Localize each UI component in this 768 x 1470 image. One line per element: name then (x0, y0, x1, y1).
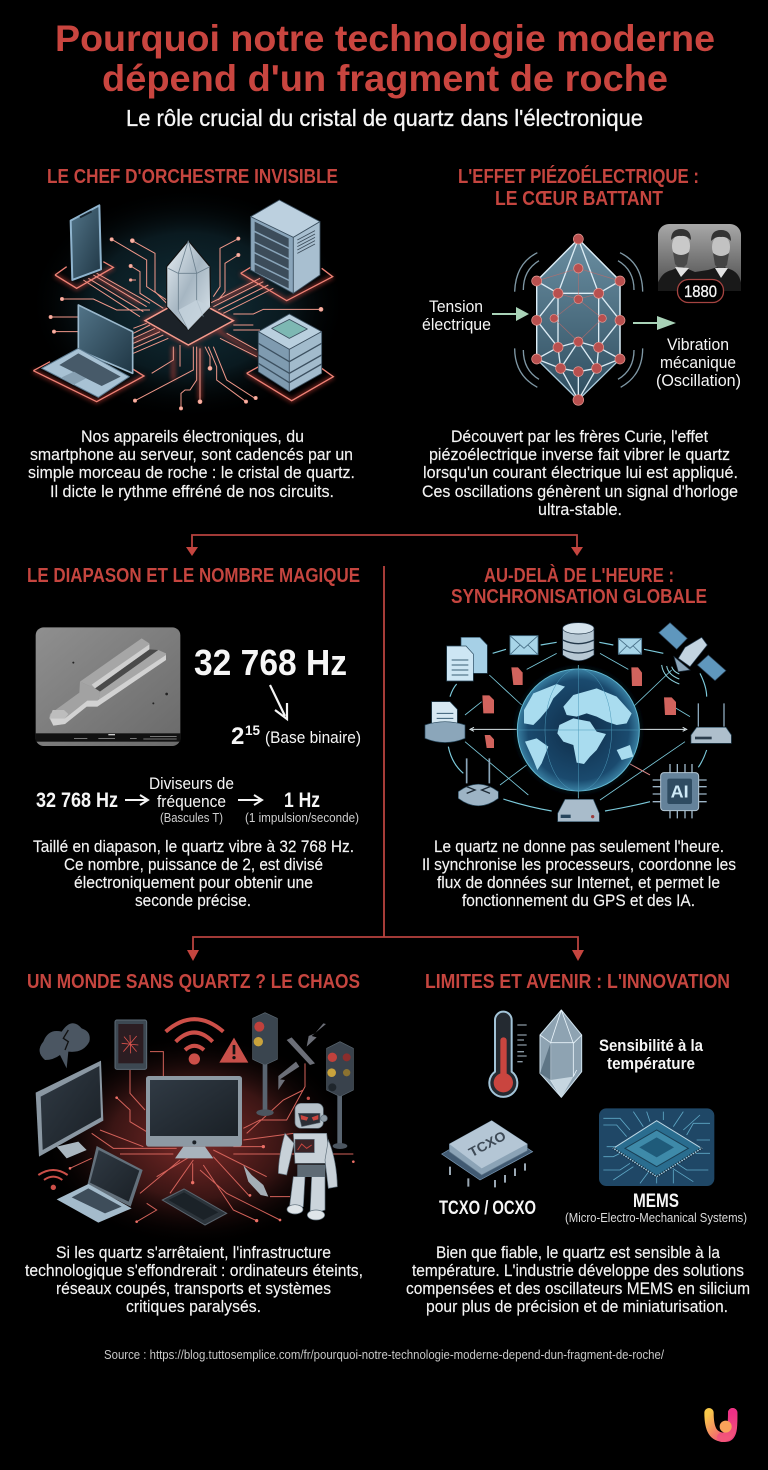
satellite (659, 623, 726, 681)
arrow (238, 795, 262, 805)
icon: logo (709, 1413, 733, 1437)
text: monde sans quartz: Si les quartz s'arrêtaient, l'infrastructure (56, 1243, 331, 1262)
text: effet piézoélectrique: lorsqu'un courant électrique lui est appliqué. (423, 463, 738, 482)
thermometer (489, 1012, 527, 1097)
text: chef d'orchestre: simple morceau de roche : le cristal de quartz. (28, 463, 355, 482)
label: tension électrique: Tension (429, 297, 483, 316)
illustration: crystal lattice (515, 234, 643, 405)
phone (71, 205, 101, 280)
slot shadow between prongs (95, 649, 158, 692)
power of two: 2 (231, 723, 244, 750)
power of two: 15 (245, 722, 260, 738)
text: au-delà de l'heure: Il synchronise les processeurs, coordonne les (422, 855, 736, 874)
connector arrows: row 1 to row 2 (186, 535, 583, 556)
divider chain: (1 impulsion/seconde) (245, 810, 359, 825)
label: MEMS (565, 1191, 747, 1225)
laptop (57, 1146, 143, 1223)
arrow (125, 795, 148, 805)
divider chain: (Bascules T) (160, 810, 223, 825)
label: sensibilité: température (607, 1054, 695, 1073)
label: tension électrique: électrique (422, 315, 491, 334)
source line: Source : https://blog.tuttosemplice.com/fr/pourquoi-notre-technologie-moderne-depend-dun-fragment-de-roche/ (104, 1347, 664, 1362)
database (563, 623, 594, 661)
text: diapason: Taillé en diapason, le quartz vibre à 32 768 Hz. (33, 837, 354, 856)
divider chain: 32 768 Hz (36, 789, 118, 812)
atoms (532, 234, 625, 405)
printer/file server (425, 702, 465, 742)
arrow: frequency to power of two (270, 685, 287, 719)
illustration: temperature sensitivity (489, 1010, 582, 1097)
title: Pourquoi notre technologie moderne (55, 18, 715, 59)
lattice body (537, 239, 620, 400)
divider chain: 1 Hz (284, 789, 320, 812)
text: effet piézoélectrique (422, 427, 738, 519)
data files (482, 667, 676, 748)
text: chef d'orchestre: Nos appareils électroniques, du (81, 427, 304, 446)
title: dépend d'un fragment de roche (102, 58, 668, 99)
text: au-delà de l'heure: Le quartz ne donne pas seulement l'heure. (434, 837, 724, 856)
subtitle: Le rôle crucial du cristal de quartz dans l'électronique (126, 105, 643, 131)
smartphone (162, 1189, 227, 1225)
crystal (540, 1010, 582, 1097)
heading: effet piézoélectrique: LE CŒUR BATTANT (495, 188, 663, 210)
text: limites et avenir (406, 1243, 750, 1316)
frequency value: 32 768 Hz (194, 642, 347, 683)
illustration: TCXO chip: TCXO (466, 1128, 508, 1160)
text: au-delà de l'heure: flux de données sur Internet, et permet le (437, 873, 720, 892)
divider chain: Diviseurs de (149, 774, 234, 793)
text: chef d'orchestre: smartphone au serveur, sont cadencés par un (30, 445, 353, 464)
text: effet piézoélectrique: piézoélectrique inverse fait vibrer le quartz (429, 445, 730, 464)
text: diapason: électroniquement pour obtenir une (74, 873, 313, 892)
cracked tablet (115, 1020, 147, 1069)
label: vibration mécanique: (Oscillation) (656, 371, 741, 390)
envelopes (510, 636, 642, 655)
text: au-delà de l'heure: fonctionnement du GPS et des IA. (462, 891, 695, 910)
ring links (448, 642, 707, 811)
connector arrows: centre line to row 3 (187, 566, 584, 961)
server (251, 200, 320, 293)
monitor centre (146, 1076, 242, 1158)
divider chain: fréquence (157, 792, 226, 811)
broken arrows (278, 1023, 326, 1090)
text: limites et avenir: pour plus de précision et de miniaturisation. (426, 1297, 728, 1316)
warning sign (219, 1038, 248, 1063)
lit edges (50, 655, 166, 726)
text: diapason (33, 837, 354, 910)
red wifi small (38, 1170, 68, 1189)
label: MEMS: (Micro-Electro-Mechanical Systems) (565, 1210, 747, 1225)
heading: limites et avenir: LIMITES ET AVENIR : L'INNOVATION (425, 971, 730, 993)
heading: effet piézoélectrique: L'EFFET PIÉZOÉLECTRIQUE : (458, 165, 699, 188)
broken traces (70, 1052, 353, 1222)
router right (691, 703, 731, 743)
platforms (33, 262, 333, 402)
heading: au-delà de l'heure: AU-DELÀ DE L'HEURE : (484, 564, 674, 587)
broken wifi (166, 1019, 223, 1050)
robot (278, 1097, 337, 1220)
heading: au-delà de l'heure (451, 564, 707, 608)
storm cloud (40, 1023, 90, 1068)
photo: Curie brothers with year (658, 224, 741, 302)
chip base (145, 297, 233, 345)
heading: au-delà de l'heure: SYNCHRONISATION GLOBALE (451, 586, 707, 608)
text: effet piézoélectrique: ultra-stable. (538, 500, 622, 519)
label: vibration mécanique: Vibration (667, 335, 729, 354)
illustration: quartz hub linking devices (28, 187, 348, 420)
text: diapason: seconde précise. (135, 891, 251, 910)
illustration: global network (425, 623, 731, 822)
label: MEMS: MEMS (633, 1191, 679, 1212)
laptop (42, 305, 133, 397)
title (55, 18, 715, 99)
label: vibration mécanique (656, 335, 741, 390)
text: monde sans quartz (25, 1243, 363, 1316)
power of two: (Base binaire) (265, 728, 361, 747)
lower prong (97, 650, 166, 707)
power of two (231, 722, 361, 750)
label: sensibilité (599, 1036, 703, 1073)
label: sensibilité: Sensibilité à la (599, 1036, 703, 1055)
arrow: vibration out (633, 316, 676, 330)
globe (510, 662, 647, 798)
photo: microscopic tuning fork (36, 627, 180, 746)
text: monde sans quartz: réseaux coupés, transports et systèmes (56, 1279, 331, 1298)
illustration: chaos without quartz (36, 1013, 355, 1247)
heading: diapason: LE DIAPASON ET LE NOMBRE MAGIQUE (27, 565, 360, 587)
AI chip (653, 764, 707, 818)
traffic light 2 (327, 1042, 353, 1149)
text: limites et avenir: température. L'industrie développe des solutions (412, 1261, 744, 1280)
text: limites et avenir: Bien que fiable, le quartz est sensible à la (436, 1243, 720, 1262)
text: effet piézoélectrique: Ces oscillations génèrent un signal d'horloge (422, 482, 738, 501)
illustration: MEMS chip (599, 1108, 714, 1186)
heading: effet piézoélectrique (458, 165, 699, 210)
circuit traces (51, 239, 320, 408)
stacked drive unit (258, 314, 322, 392)
text: chef d'orchestre (28, 427, 355, 501)
label: tension électrique (422, 297, 491, 334)
text: effet piézoélectrique: Découvert par les frères Curie, l'effet (451, 427, 708, 446)
arrow: tension in (492, 307, 529, 321)
label: TCXO / OCXO: TCXO / OCXO (439, 1198, 536, 1219)
divider chain (36, 774, 359, 825)
label: vibration mécanique: mécanique (660, 353, 736, 372)
vibration arcs (515, 253, 643, 387)
debris mouse (243, 1165, 268, 1197)
text: monde sans quartz: technologique s'effondrerait : ordinateurs éteints, (25, 1261, 363, 1280)
router left (458, 758, 498, 806)
text: monde sans quartz: critiques paralysés. (126, 1297, 261, 1316)
text: au-delà de l'heure (422, 837, 736, 910)
traffic light 1 (253, 1013, 277, 1116)
year badge: 1880 (684, 282, 717, 301)
heading: monde sans quartz: UN MONDE SANS QUARTZ ? LE CHAOS (27, 971, 360, 993)
AI chip: AI (671, 781, 689, 801)
documents (447, 637, 487, 681)
hub bottom (558, 799, 599, 822)
heading: chef d'orchestre: LE CHEF D'ORCHESTRE INVISIBLE (47, 166, 338, 188)
text: diapason: Ce nombre, puissance de 2, est divisé (64, 855, 323, 874)
monitor left (36, 1061, 103, 1158)
stem and yoke (49, 682, 100, 726)
text: chef d'orchestre: Il dicte le rythme effréné de nos circuits. (50, 482, 334, 501)
quartz crystal (167, 241, 211, 330)
upper prong (80, 638, 149, 688)
illustration: TCXO chip (442, 1121, 533, 1187)
